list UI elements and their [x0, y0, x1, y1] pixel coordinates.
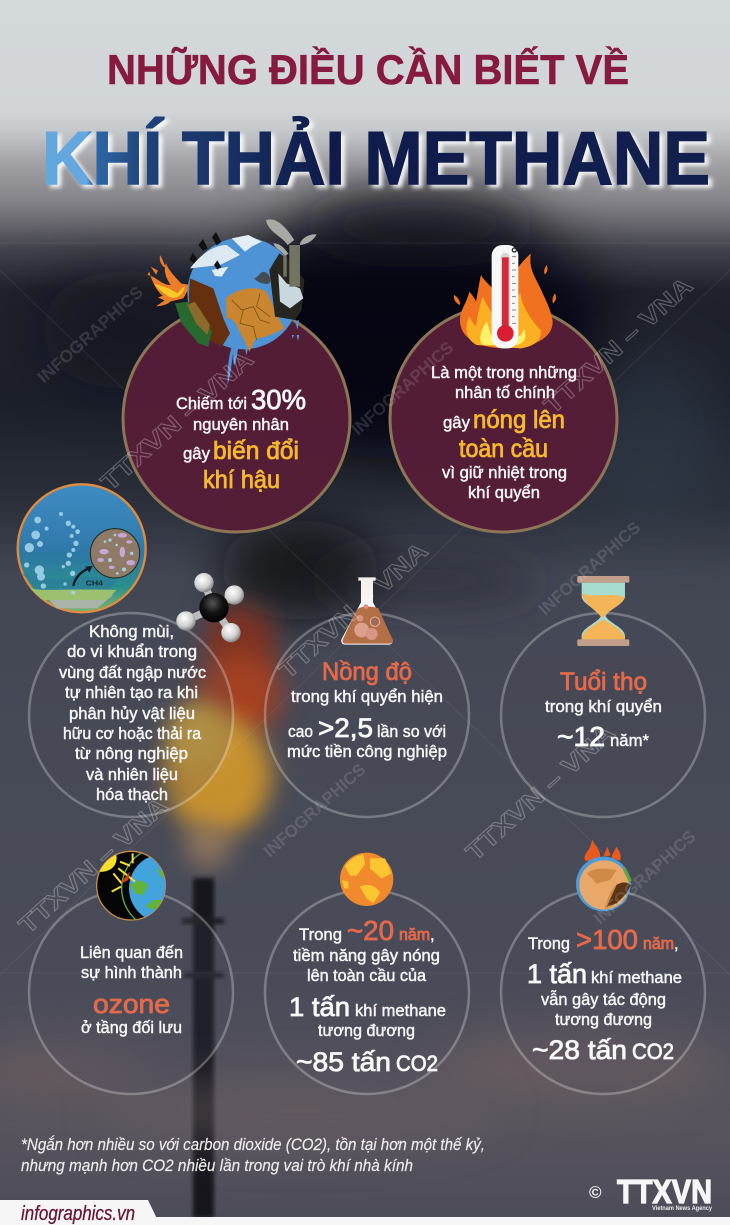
text: 20 years: khí methane	[355, 1002, 446, 1020]
watermarks: INFOGRAPHICS	[260, 760, 369, 861]
text: methane sources: hữu cơ hoặc thải ra	[63, 725, 202, 743]
logo: TTXVN	[589, 1173, 712, 1212]
logo: TTXVN: TTXVN	[617, 1173, 712, 1210]
logo: TTXVN: Vietnam News Agency	[652, 1205, 712, 1212]
text: 100 years: 1 tấn	[527, 959, 587, 989]
watermarks: TTXVN – VNA	[539, 272, 698, 419]
icon: hourglass	[577, 576, 629, 646]
footnote	[21, 1135, 485, 1175]
text: climate change: khí hậu	[203, 466, 280, 494]
text: climate change: 30%	[251, 384, 306, 415]
text: concentration: mức tiền công nghiệp	[287, 743, 447, 761]
text: 20 years: lên toàn cầu của	[307, 967, 427, 985]
panel: methane sources	[18, 484, 244, 817]
watermarks: INFOGRAPHICS	[535, 518, 644, 619]
text: 20 years: 1 tấn	[289, 992, 350, 1022]
panel: concentration	[265, 577, 469, 817]
text: concentration: trong khí quyển hiện	[291, 688, 443, 706]
panel: global warming	[390, 245, 617, 532]
watermarks: TTXVN – VNA	[461, 719, 620, 866]
text: 20 years: ~20	[347, 915, 394, 946]
panel circle	[265, 613, 469, 817]
panel: climate change	[123, 219, 350, 532]
text: 100 years: ~28 tấn	[532, 1035, 627, 1065]
text: 100 years: năm	[643, 935, 674, 953]
text: concentration: lần so với	[377, 723, 446, 741]
text: ozone	[80, 944, 183, 1037]
footnote: *Ngắn hơn nhiều so với carbon dioxide (CO2), tồn tại hơn một thế kỷ,	[21, 1135, 485, 1154]
text: lifetime	[545, 668, 662, 752]
panel circle	[501, 890, 705, 1094]
text: global warming	[431, 364, 577, 502]
text: 20 years: ~85 tấn	[296, 1047, 391, 1077]
text: lifetime: Tuổi thọ	[560, 668, 647, 696]
text: methane sources: tự nhiên tạo ra khi	[65, 684, 198, 702]
text: methane sources	[59, 623, 206, 804]
text: 100 years: ,	[674, 935, 679, 953]
text: global warming: toàn cầu	[459, 435, 548, 463]
panel circle	[29, 890, 233, 1094]
panel: 100 years	[501, 840, 705, 1094]
panel: 20 years	[265, 853, 469, 1094]
text: climate change: gây	[183, 445, 211, 463]
watermarks: INFOGRAPHICS	[590, 827, 699, 928]
text: 100 years: Trong	[528, 935, 570, 953]
icon: burning earth	[576, 840, 632, 911]
panel circle	[123, 305, 350, 532]
panel: lifetime	[501, 576, 705, 817]
text: ozone: sự hình thành	[81, 964, 182, 982]
footnote: nhưng mạnh hơn CO2 nhiều lần trong vai trò khí nhà kính	[21, 1156, 413, 1175]
panel circle	[501, 613, 705, 817]
panel circle	[29, 613, 233, 817]
watermarks: INFOGRAPHICS	[348, 338, 457, 439]
text: methane sources: từ nông nghiệp	[75, 745, 188, 763]
watermarks: INFOGRAPHICS	[34, 283, 147, 387]
icon: wetland microbes cross section	[18, 484, 146, 612]
text: climate change: Chiếm tới	[176, 395, 247, 413]
text: methane sources: vùng đất ngập nước	[59, 664, 206, 682]
icon: ozone layer	[96, 850, 166, 921]
text: ozone: ozone	[93, 989, 170, 1019]
text: 100 years: tương đương	[555, 1011, 652, 1029]
text: 100 years: khí methane	[591, 969, 682, 987]
text: concentration: >2,5	[318, 713, 373, 743]
text: 20 years: CO2	[396, 1051, 438, 1076]
icon: flask	[341, 577, 393, 645]
logo: TTXVN: ©	[589, 1183, 602, 1202]
text: ozone: Liên quan đến	[80, 944, 183, 962]
watermarks	[14, 272, 699, 939]
text: global warming: nhân tố chính	[455, 384, 555, 402]
text: methane sources: do vi khuẩn trong	[67, 643, 197, 661]
text: lifetime: năm*	[610, 732, 650, 750]
text: ozone: ở tầng đối lưu	[81, 1019, 182, 1037]
panel circle	[390, 305, 617, 532]
text: concentration	[287, 658, 447, 761]
text: global warming: gây	[443, 414, 471, 432]
text: 20 years: Trong	[299, 926, 342, 944]
text: methane sources: phân hủy vật liệu	[69, 705, 195, 723]
text: climate change: biến đổi	[213, 437, 299, 465]
website label: infographics.vn	[21, 1203, 135, 1225]
title: first line: NHỮNG ĐIỀU CẦN BIẾT VỀ	[107, 45, 629, 93]
text: 20 years	[289, 915, 446, 1077]
text: methane sources: Không mùi,	[89, 623, 174, 641]
text: 100 years	[527, 924, 682, 1065]
text: global warming: khí quyển	[468, 484, 540, 502]
icon: wetland microbes cross section: CH4	[86, 578, 104, 587]
text: lifetime: trong khí quyển	[545, 698, 662, 716]
text: climate change	[176, 384, 306, 494]
panel circle	[265, 890, 469, 1094]
watermarks: TTXVN – VNA	[14, 792, 173, 939]
panel: ozone	[29, 847, 233, 1094]
text: 20 years: tương đương	[318, 1022, 415, 1040]
text: concentration: Nồng độ	[322, 658, 412, 686]
text: 20 years: năm	[399, 926, 430, 944]
text: 20 years: ,	[430, 926, 435, 944]
text: 20 years: tiềm năng gây nóng	[293, 947, 440, 965]
text: 100 years: vẫn gây tác động	[541, 990, 666, 1009]
watermarks: TTXVN – VNA	[274, 537, 433, 684]
text: 100 years: CO2	[632, 1039, 674, 1064]
bottom bar	[0, 1200, 730, 1225]
text: concentration: cao	[288, 723, 313, 741]
text: 100 years: >100	[576, 924, 638, 955]
text: methane sources: và nhiên liệu	[86, 766, 178, 784]
icon: thermometer and flames	[454, 245, 556, 348]
text: lifetime: ~12	[557, 721, 605, 752]
icon: damaged earth with factory	[147, 219, 317, 385]
text: climate change: nguyên nhân	[193, 416, 289, 434]
icon: hot orange globe	[340, 853, 393, 906]
text: methane sources: hóa thạch	[96, 786, 168, 804]
watermarks: TTXVN – VNA	[96, 346, 259, 496]
text: global warming: nóng lên	[473, 406, 565, 434]
text: global warming: Là một trong những	[431, 364, 577, 382]
text: global warming: vì giữ nhiệt trong	[442, 464, 567, 482]
icon: methane molecule	[176, 573, 244, 642]
